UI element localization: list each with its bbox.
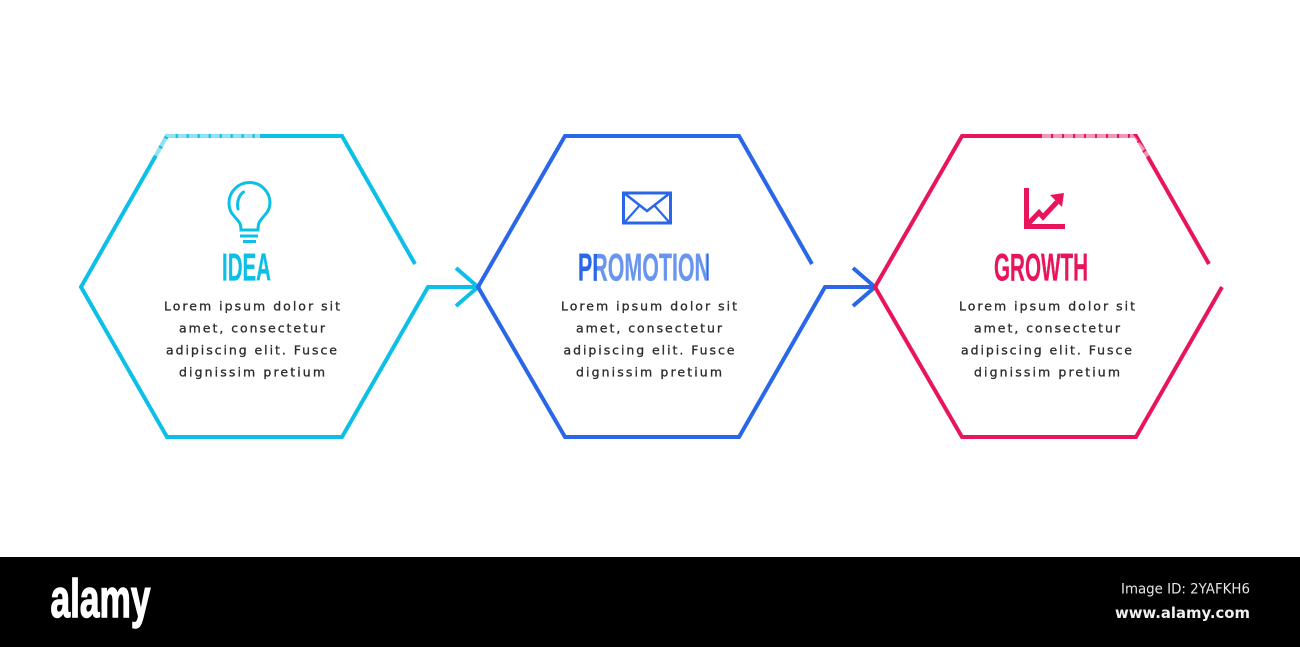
heading: idea: IDEA <box>222 246 271 290</box>
arrow: promotion to growth <box>853 268 875 306</box>
image id: Image ID: 2YAFKH6 <box>1121 582 1250 598</box>
text block: idea: amet, consectetur <box>179 320 326 336</box>
heading: growth: GROWTH <box>994 246 1088 290</box>
text block: promotion <box>561 298 737 380</box>
text block: promotion: amet, consectetur <box>576 320 723 336</box>
website: www.alamy.com <box>1115 604 1250 622</box>
arrow: idea to promotion <box>456 268 478 306</box>
text block: growth: dignissim pretium <box>974 364 1120 380</box>
text block: growth: Lorem ipsum dolor sit <box>959 298 1135 314</box>
text block: idea: adipiscing elit. Fusce <box>166 342 337 358</box>
panel: promotion <box>478 136 875 437</box>
text block: promotion: adipiscing elit. Fusce <box>564 342 735 358</box>
text block: idea: Lorem ipsum dolor sit <box>164 298 340 314</box>
icon: envelope <box>624 193 670 223</box>
text block: promotion: Lorem ipsum dolor sit <box>561 298 737 314</box>
text block: idea: dignissim pretium <box>179 364 325 380</box>
text block: idea <box>164 298 340 380</box>
panel: growth <box>875 136 1222 437</box>
hexagon outline: growth <box>875 136 1222 437</box>
hexagon outline: idea <box>81 136 478 437</box>
text block: growth: amet, consectetur <box>974 320 1121 336</box>
heading: promotion: PROMOTION <box>578 246 710 290</box>
icon: light bulb <box>229 182 270 242</box>
text block: growth <box>959 298 1135 380</box>
text block: promotion: dignissim pretium <box>576 364 722 380</box>
icon: growth chart <box>1026 188 1065 226</box>
hexagon outline: promotion <box>478 136 875 437</box>
text block: growth: adipiscing elit. Fusce <box>961 342 1132 358</box>
footer bar <box>0 557 1300 647</box>
panel: idea <box>81 136 478 437</box>
logo: alamy: alamy <box>50 569 150 629</box>
